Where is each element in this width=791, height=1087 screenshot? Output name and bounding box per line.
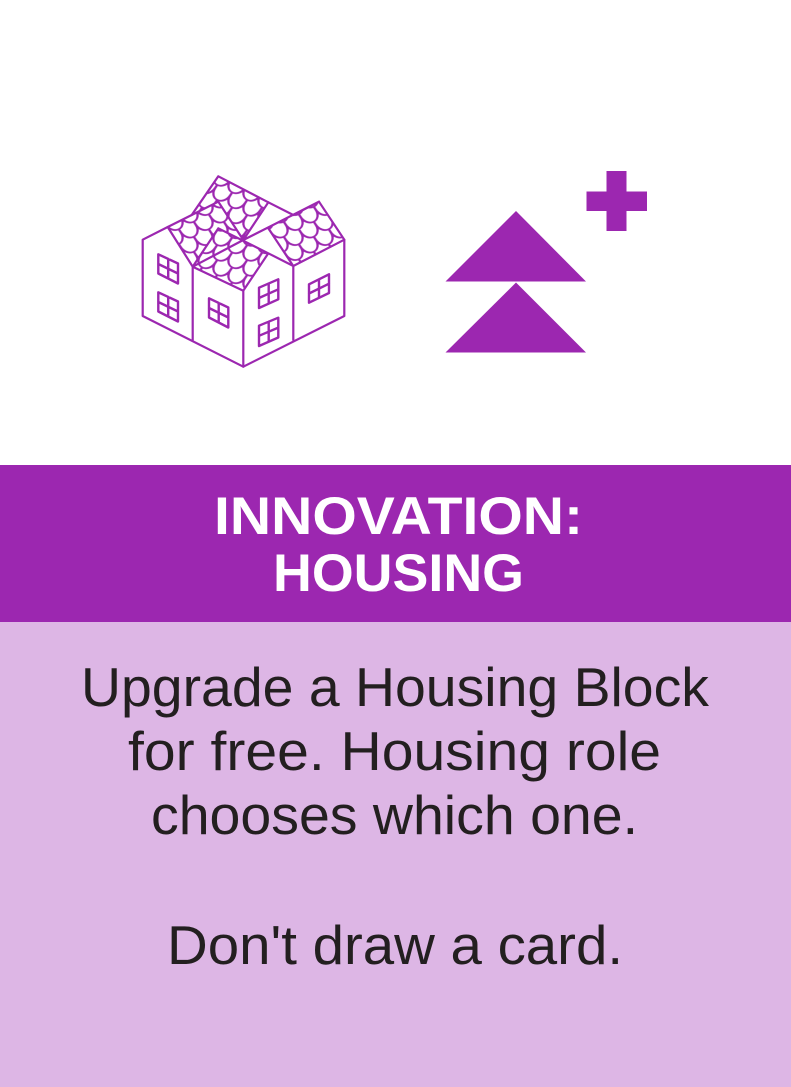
house outline: [143, 176, 344, 367]
walls and roof lines: [168, 202, 344, 367]
lower triangle: [446, 282, 586, 352]
roof scales: [168, 176, 344, 291]
text: rule description: Upgrade a Housing Block: [81, 656, 709, 718]
text: rule description: chooses which one.: [151, 784, 638, 846]
background: [0, 0, 791, 465]
panel: description: [0, 622, 791, 1087]
icon: upgrade arrows with plus: [446, 171, 647, 352]
icon: isometric house: [143, 176, 344, 367]
upper triangle: [446, 211, 586, 282]
text: rule description: for free. Housing role: [128, 720, 661, 782]
heading: INNOVATION:: [214, 487, 583, 546]
panel: title band: [0, 465, 791, 622]
windows: [158, 254, 329, 346]
text: rule description: Don't draw a card.: [167, 914, 623, 976]
plus sign: [586, 171, 647, 231]
heading: HOUSING: [273, 544, 524, 603]
